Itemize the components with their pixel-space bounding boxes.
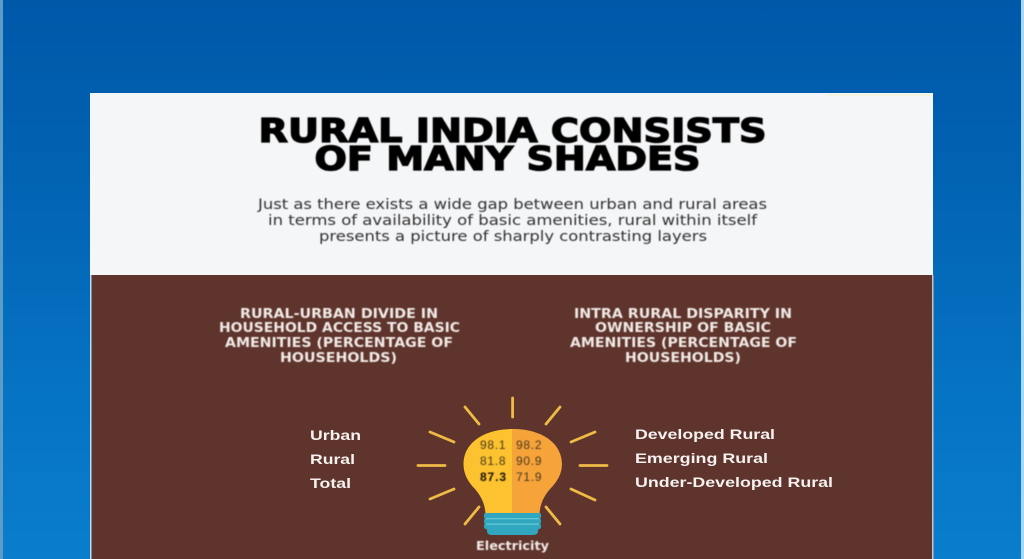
bulb values xyxy=(480,438,542,484)
bulb values: 98.1 xyxy=(480,438,506,452)
bulb values: 98.2 xyxy=(516,438,542,452)
legend: urban, rural, total: Rural xyxy=(310,451,355,467)
label: electricity: Electricity xyxy=(476,539,549,553)
legend: rural categories: Developed Rural xyxy=(635,426,775,442)
legend: rural categories: Under-Developed Rural xyxy=(635,474,833,490)
heading: intra rural disparity xyxy=(570,307,797,366)
intro text: Just as there exists a wide gap between urban and rural areas xyxy=(257,197,767,213)
panel: title area xyxy=(90,93,933,275)
legend: urban, rural, total: Total xyxy=(310,475,351,491)
panel: brown data area xyxy=(90,275,934,559)
intro text xyxy=(257,197,767,245)
legend: urban, rural, total: Urban xyxy=(310,427,361,443)
heading: intra rural disparity: OWNERSHIP OF BASIC xyxy=(595,321,771,336)
heading: intra rural disparity: AMENITIES (PERCENTAGE OF xyxy=(570,336,797,351)
heading: rural-urban divide: HOUSEHOLD ACCESS TO BASIC xyxy=(219,321,460,336)
heading: rural-urban divide: AMENITIES (PERCENTAGE OF xyxy=(225,336,453,351)
bulb values: 81.8 xyxy=(480,454,506,468)
title: RURAL INDIA CONSISTS xyxy=(258,112,766,150)
heading: intra rural disparity: INTRA RURAL DISPARITY IN xyxy=(574,307,792,322)
heading: rural-urban divide: RURAL-URBAN DIVIDE IN xyxy=(240,307,438,322)
legend: urban, rural, total xyxy=(310,427,361,491)
heading: intra rural disparity: HOUSEHOLDS) xyxy=(625,351,741,366)
heading: rural-urban divide xyxy=(219,307,460,366)
icon: light bulb rays xyxy=(418,398,607,524)
legend: rural categories: Emerging Rural xyxy=(635,450,768,466)
intro text: presents a picture of sharply contrasting layers xyxy=(319,229,707,245)
bulb values: 71.9 xyxy=(516,470,542,484)
heading: rural-urban divide: HOUSEHOLDS) xyxy=(280,351,397,366)
bulb values: 90.9 xyxy=(516,454,542,468)
intro text: in terms of availability of basic amenities, rural within itself xyxy=(268,213,758,229)
title xyxy=(258,112,766,178)
legend: rural categories xyxy=(635,426,833,490)
icon: light bulb xyxy=(464,429,562,535)
title: OF MANY SHADES xyxy=(314,140,700,178)
bulb values: 87.3 xyxy=(480,470,506,484)
